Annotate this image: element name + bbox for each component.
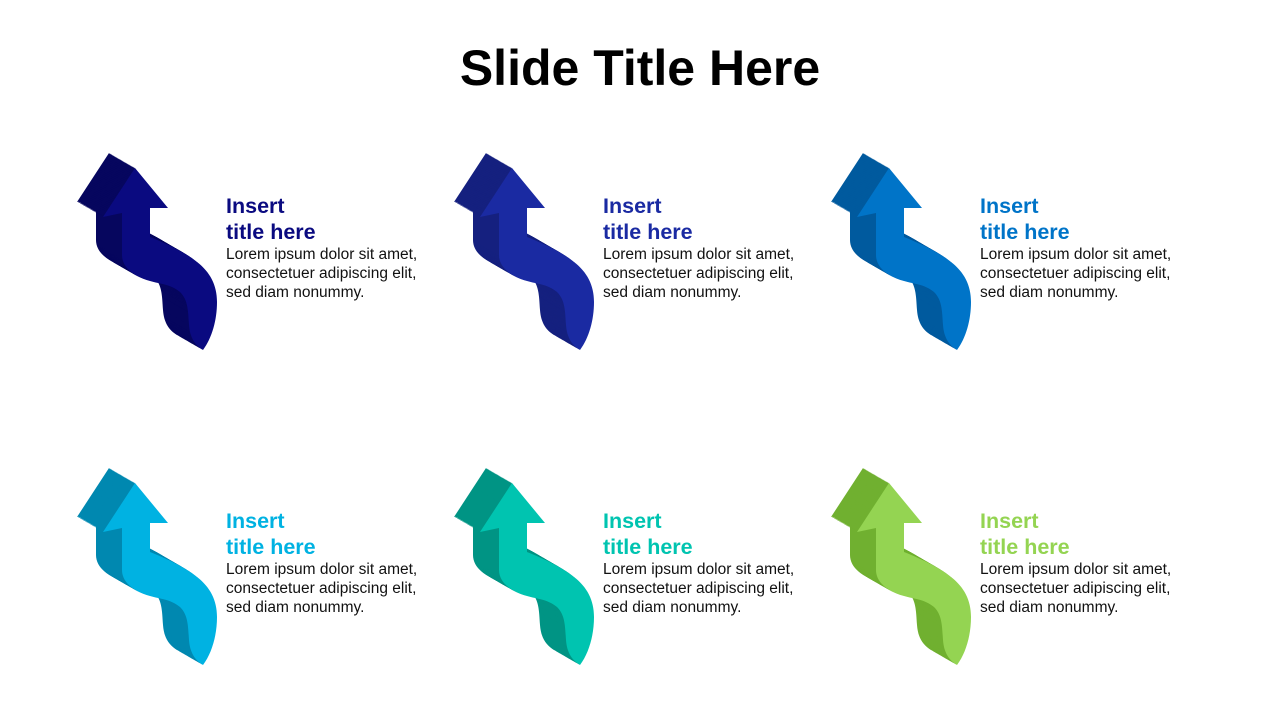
icon: arrow 2 [454, 153, 594, 350]
text block 3: Lorem ipsum dolor sit amet, consectetuer adipiscing elit, sed diam nonummy. [980, 246, 1171, 301]
text block 6 [980, 509, 1171, 616]
text block 2: Lorem ipsum dolor sit amet, consectetuer adipiscing elit, sed diam nonummy. [603, 246, 794, 301]
text block 3 [980, 194, 1171, 301]
icon: arrow 3 [831, 153, 971, 350]
icon: arrow 6 [831, 468, 971, 665]
text block 2 [603, 194, 794, 301]
text block 1: title here [226, 220, 316, 244]
text block 4: Lorem ipsum dolor sit amet, consectetuer adipiscing elit, sed diam nonummy. [226, 561, 417, 616]
text block 2: title here [603, 220, 693, 244]
text block 4: Insert [226, 509, 285, 533]
text block 4: title here [226, 535, 316, 559]
icon: arrow 5 [454, 468, 594, 665]
text block 2: Insert [603, 194, 662, 218]
text block 3: Insert [980, 194, 1039, 218]
icon: arrow 1 [77, 153, 217, 350]
text block 6: Lorem ipsum dolor sit amet, consectetuer adipiscing elit, sed diam nonummy. [980, 561, 1171, 616]
text block 5: Insert [603, 509, 662, 533]
text block 6: Insert [980, 509, 1039, 533]
text block 5: Lorem ipsum dolor sit amet, consectetuer adipiscing elit, sed diam nonummy. [603, 561, 794, 616]
text block 6: title here [980, 535, 1070, 559]
title: Slide Title Here [460, 40, 820, 96]
text block 1 [226, 194, 417, 301]
text block 5 [603, 509, 794, 616]
icon: arrow 4 [77, 468, 217, 665]
text block 4 [226, 509, 417, 616]
text block 1: Insert [226, 194, 285, 218]
text block 1: Lorem ipsum dolor sit amet, consectetuer adipiscing elit, sed diam nonummy. [226, 246, 417, 301]
text block 3: title here [980, 220, 1070, 244]
text block 5: title here [603, 535, 693, 559]
